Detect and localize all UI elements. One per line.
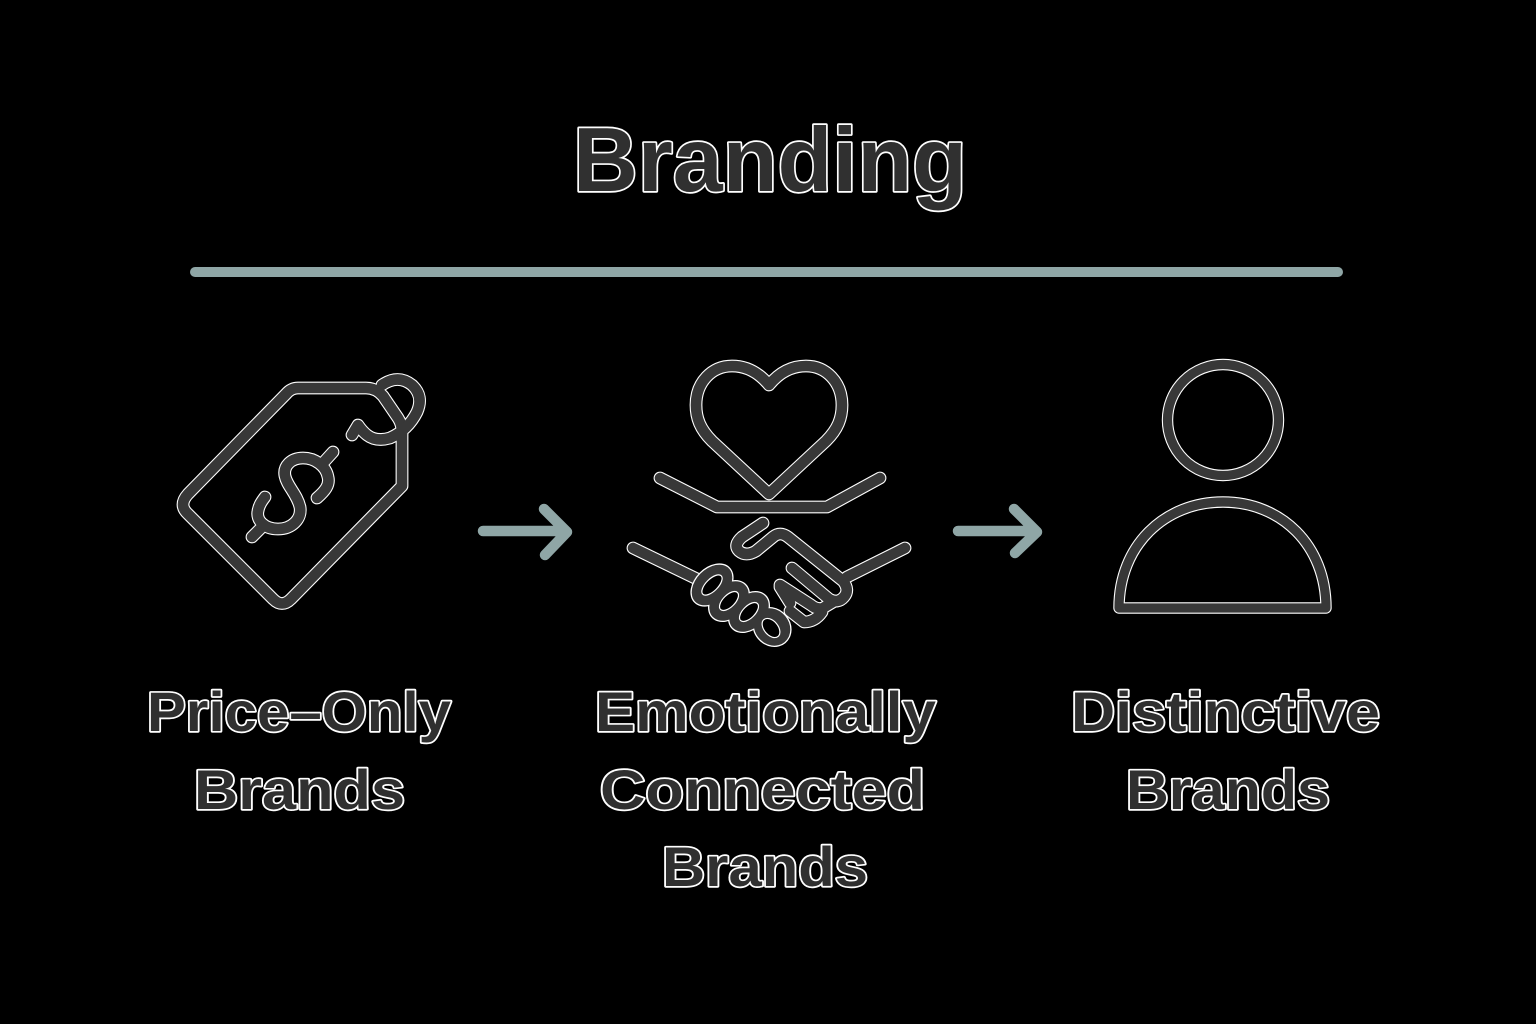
label: emotionally connected brands bbox=[595, 680, 936, 898]
title: Branding bbox=[573, 110, 967, 211]
label: distinctive brands: Distinctive bbox=[1071, 680, 1380, 743]
label: emotionally connected brands: Emotionally bbox=[595, 680, 936, 743]
label: emotionally connected brands: Connected bbox=[600, 758, 925, 821]
label: price-only brands: Price–Only bbox=[147, 680, 451, 743]
label: distinctive brands bbox=[1071, 680, 1380, 821]
label: emotionally connected brands: Brands bbox=[662, 835, 868, 898]
label: distinctive brands: Brands bbox=[1126, 758, 1330, 821]
icon: person bbox=[1119, 364, 1326, 608]
label: price-only brands: Brands bbox=[194, 758, 405, 821]
label: price-only brands bbox=[147, 680, 451, 821]
icon: heart over handshake bbox=[633, 366, 905, 655]
left hand knuckles bbox=[682, 555, 800, 655]
horizontal rule under title bbox=[190, 267, 1343, 277]
arrow: price-only to emotionally connected bbox=[483, 509, 567, 555]
icon: price tag bbox=[183, 380, 420, 604]
arrow: emotionally connected to distinctive bbox=[958, 509, 1037, 553]
